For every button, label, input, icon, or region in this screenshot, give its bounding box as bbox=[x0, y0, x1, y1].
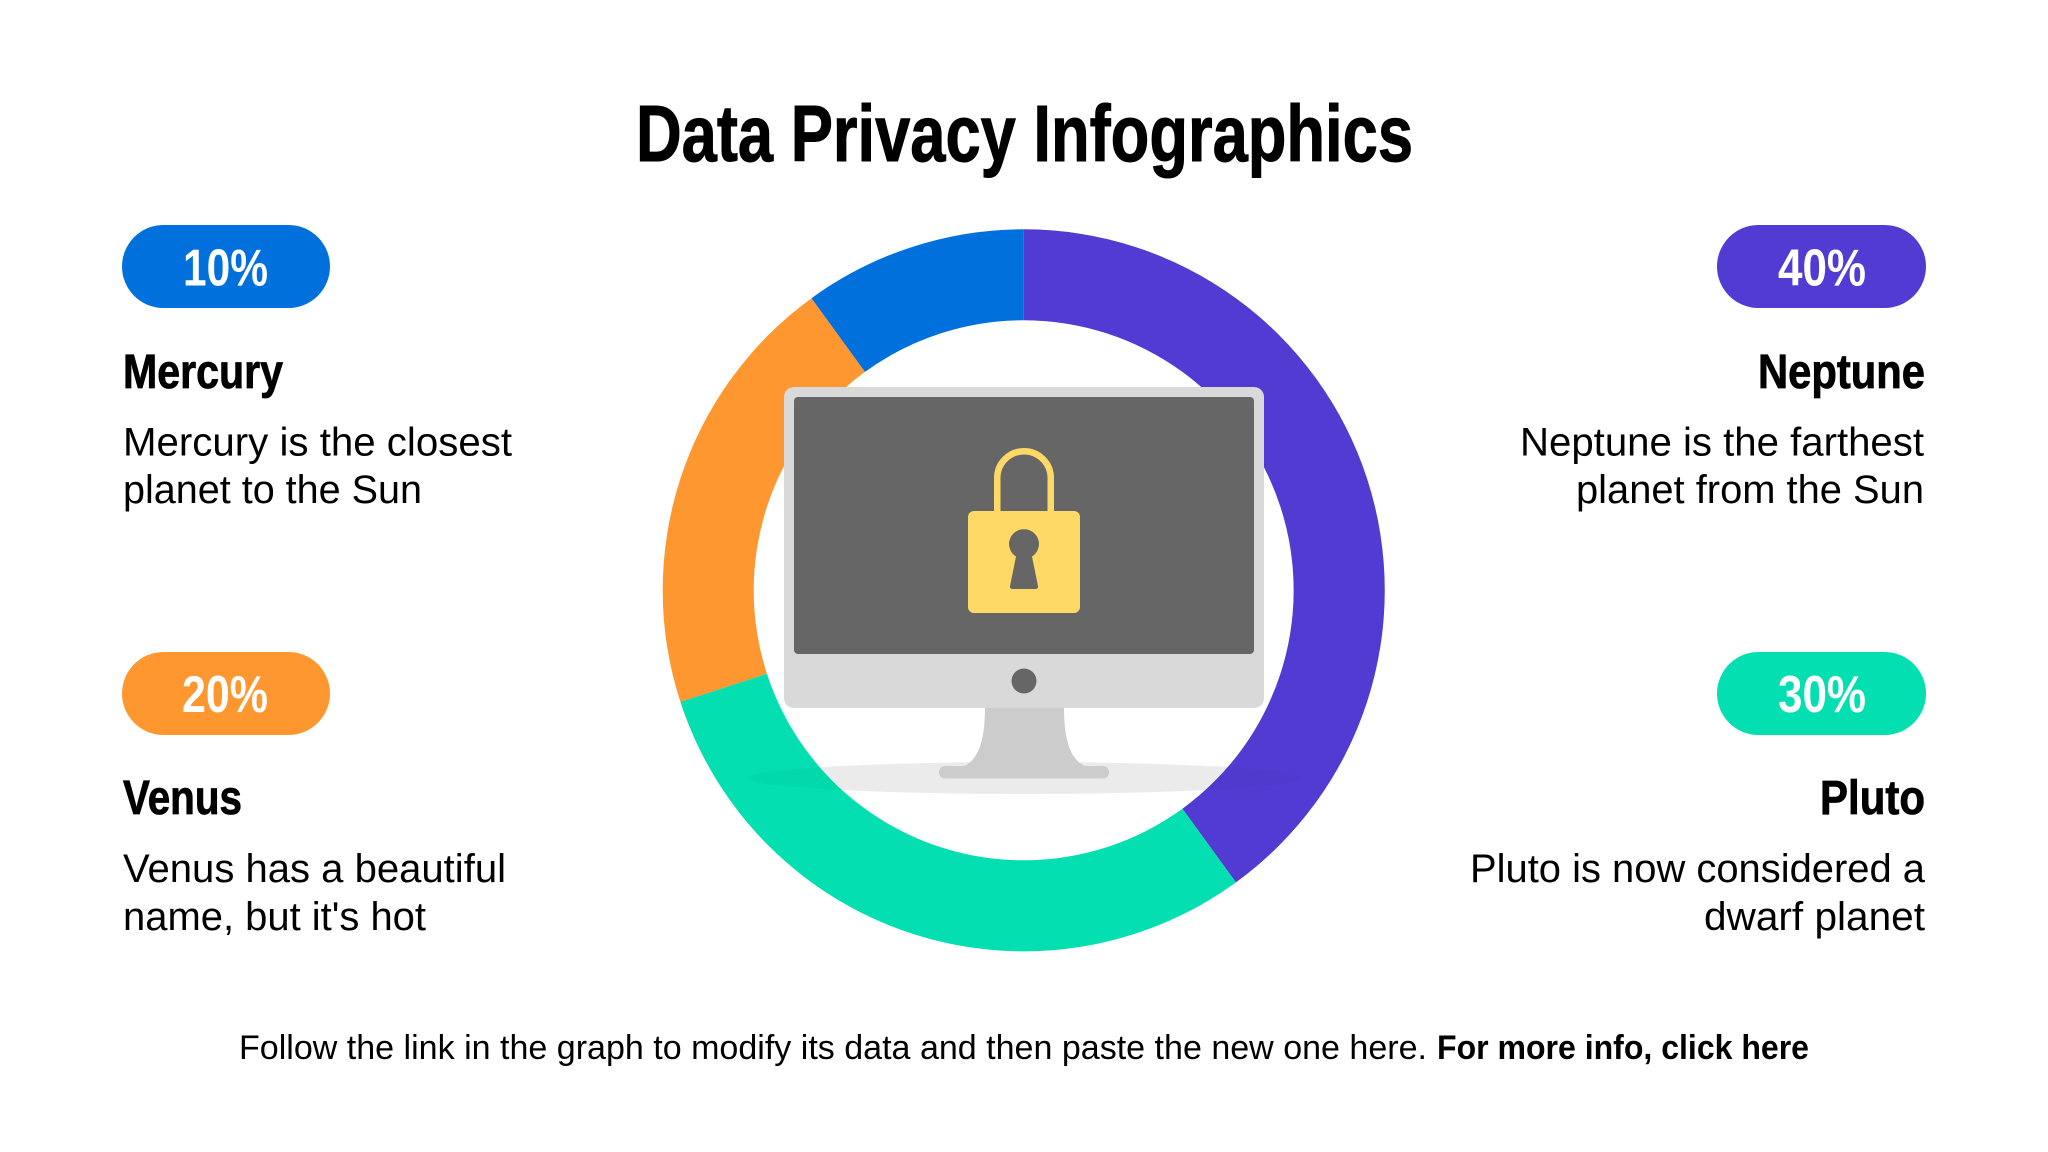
title: Data Privacy Infographics bbox=[636, 89, 1413, 178]
padlock body bbox=[968, 511, 1080, 613]
footer note: Follow the link in the graph to modify its data and then paste the new one here. bbox=[239, 1029, 1427, 1067]
pill value: 20% bbox=[182, 666, 268, 724]
padlock shackle bbox=[997, 451, 1051, 515]
donut chart bbox=[663, 229, 1385, 951]
monitor body bbox=[784, 387, 1264, 708]
description bbox=[123, 420, 512, 512]
description: Pluto is now considered a bbox=[1470, 847, 1926, 891]
icon: desktop monitor with padlock bbox=[784, 387, 1264, 794]
monitor shadow bbox=[820, 762, 1228, 794]
panel: Venus bbox=[122, 652, 506, 939]
description: Mercury is the closest bbox=[123, 420, 512, 464]
monitor button bbox=[1012, 668, 1036, 694]
pill: 20% bbox=[122, 652, 330, 735]
pill value: 30% bbox=[1778, 666, 1866, 724]
description: planet to the Sun bbox=[123, 468, 422, 512]
panel: Mercury bbox=[122, 225, 512, 512]
description bbox=[1520, 420, 1924, 512]
heading: Venus bbox=[123, 772, 242, 825]
pill value: 10% bbox=[183, 240, 268, 298]
description bbox=[123, 847, 506, 939]
segment: Neptune 40% bbox=[1024, 229, 1385, 882]
description: dwarf planet bbox=[1704, 895, 1925, 939]
footer note: For more info, click here bbox=[1437, 1029, 1809, 1067]
pill: 30% bbox=[1717, 652, 1926, 735]
segment: Pluto 30% bbox=[680, 674, 1236, 951]
monitor screen bbox=[794, 397, 1254, 654]
stand base bbox=[939, 766, 1109, 778]
pill: 10% bbox=[122, 225, 330, 308]
heading: Neptune bbox=[1758, 346, 1925, 399]
infographic canvas bbox=[122, 102, 1926, 1066]
heading: Pluto bbox=[1820, 772, 1925, 825]
keyhole bbox=[1009, 529, 1039, 589]
description: Venus has a beautiful bbox=[123, 847, 506, 891]
description: planet from the Sun bbox=[1576, 468, 1924, 512]
panel: Pluto bbox=[1470, 652, 1926, 939]
description bbox=[1470, 847, 1926, 939]
description: name, but it's hot bbox=[123, 895, 426, 939]
description: Neptune is the farthest bbox=[1520, 420, 1924, 464]
panel: Neptune bbox=[1520, 225, 1926, 512]
heading: Mercury bbox=[123, 346, 283, 399]
pill: 40% bbox=[1717, 225, 1926, 308]
segment: Mercury 10% bbox=[812, 229, 1024, 372]
segment: Venus 20% bbox=[663, 298, 865, 702]
padlock bbox=[968, 451, 1080, 613]
monitor stand bbox=[962, 706, 1087, 767]
pill value: 40% bbox=[1778, 240, 1866, 298]
